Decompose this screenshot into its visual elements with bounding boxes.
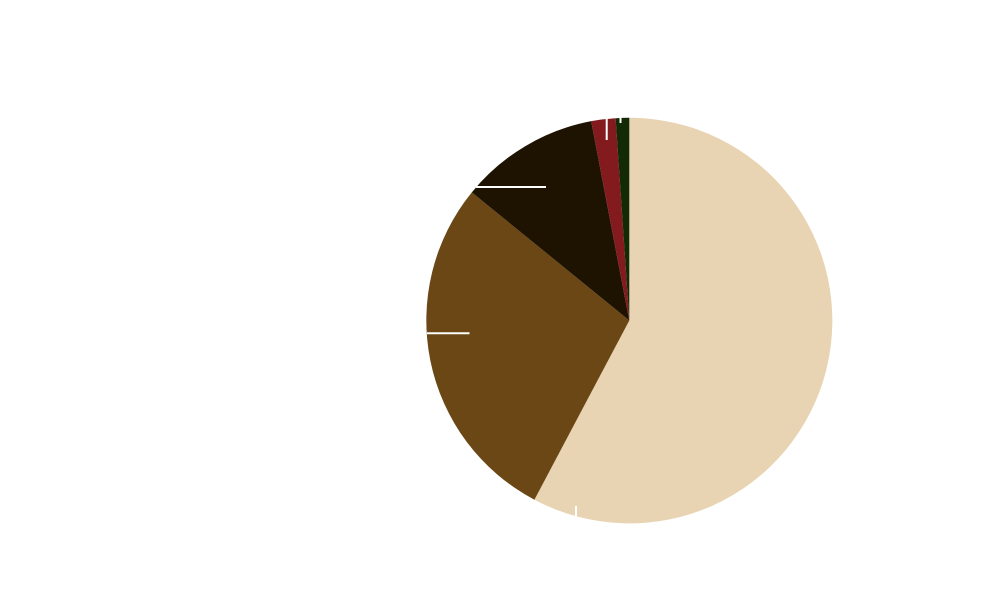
pie slice: brown	[426, 192, 629, 500]
leader line: red slice	[606, 118, 608, 140]
pie slice: dark green	[616, 118, 629, 320]
pie slice: cream (largest)	[534, 118, 832, 523]
pie slice: dark brown	[472, 121, 629, 320]
leader line: dark brown slice	[476, 186, 546, 188]
pie slice: red	[591, 118, 629, 320]
leader line: cream slice	[575, 506, 577, 518]
leader line: brown slice	[427, 332, 470, 334]
leader line: green slice	[620, 117, 622, 123]
